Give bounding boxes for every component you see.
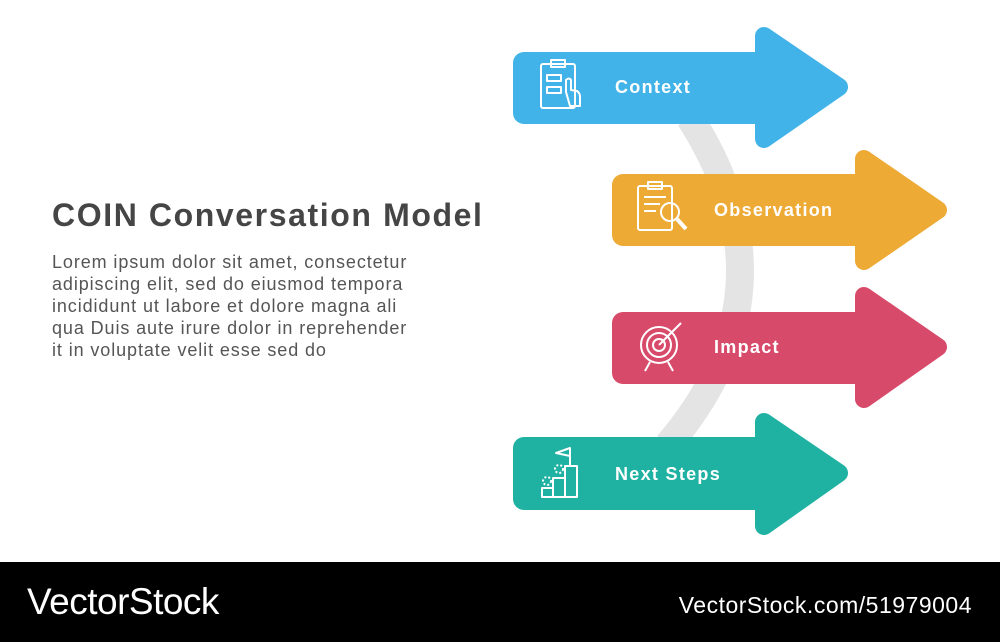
label: Impact: Impact — [714, 337, 780, 357]
footer bar — [0, 562, 1000, 642]
description text: Lorem ipsum dolor sit amet, consectetur — [52, 252, 407, 272]
icon: clipboard magnifier — [638, 182, 686, 230]
description text: qua Duis aute irure dolor in reprehender — [52, 318, 407, 338]
footer brand: VectorStock — [27, 581, 219, 622]
footer url: VectorStock.com/51979004 — [679, 592, 972, 618]
icon: steps with flag — [542, 448, 577, 497]
description text: it in voluptate velit esse sed do — [52, 340, 327, 360]
description text: incididunt ut labore et dolore magna ali — [52, 296, 397, 316]
arrow: Context — [513, 36, 839, 139]
label: Next Steps: Next Steps — [615, 464, 721, 484]
icon: clipboard hand — [541, 60, 580, 108]
gray connector arc — [668, 118, 740, 445]
arrow: Next Steps — [513, 422, 839, 526]
description text — [52, 252, 407, 360]
description text: adipiscing elit, sed do eiusmod tempora — [52, 274, 403, 294]
arrow: Observation — [612, 159, 938, 261]
title: COIN Conversation Model — [52, 197, 484, 233]
label: Context: Context — [615, 77, 691, 97]
icon: target — [641, 323, 681, 371]
label: Observation: Observation — [714, 200, 833, 220]
arrow: Impact — [612, 296, 938, 399]
